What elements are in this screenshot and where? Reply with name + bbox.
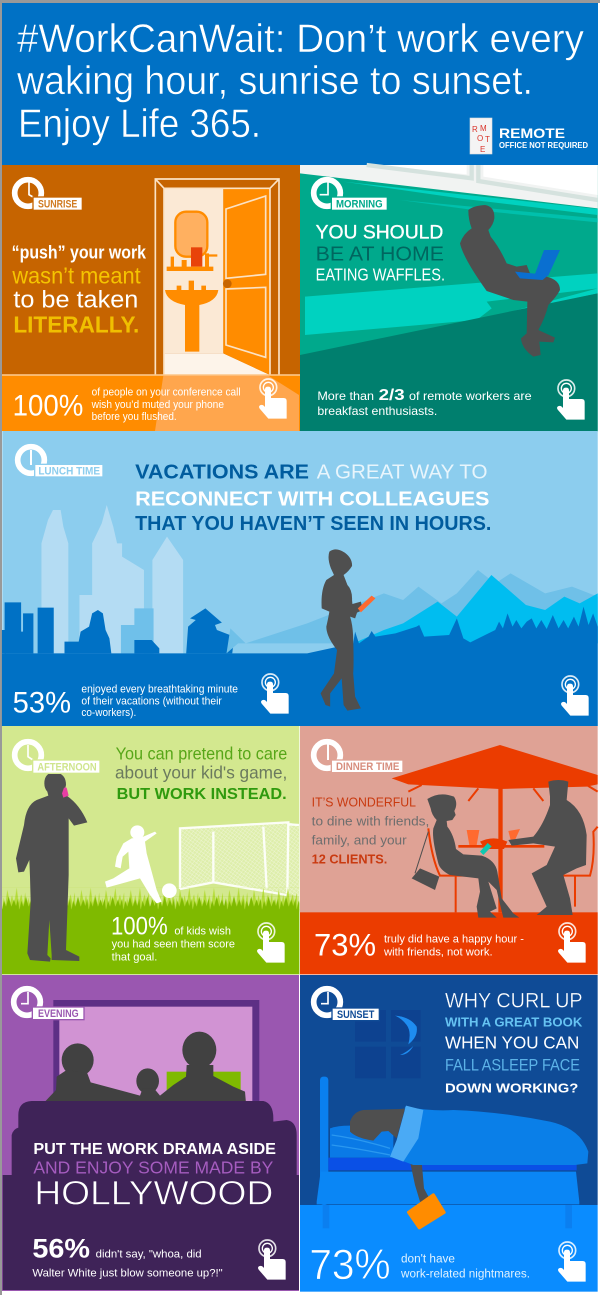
- headline: LITERALLY.: [13, 312, 139, 338]
- headline: [316, 222, 445, 285]
- headline: You can pretend to care: [116, 743, 287, 763]
- stat text: of kids wish: [174, 925, 231, 937]
- page border: [0, 0, 2, 1295]
- logo text: Remote: REMOTE: [499, 125, 565, 141]
- stat text: of their vacations (without their: [81, 694, 222, 707]
- stat text: [13, 682, 238, 719]
- title: [16, 17, 584, 146]
- stat text: enjoyed every breathtaking minute: [81, 682, 238, 695]
- icon: sunrise clock: [15, 178, 82, 210]
- stat text: breakfast enthusiasts.: [317, 405, 437, 418]
- headline: BUT WORK INSTEAD.: [117, 786, 287, 803]
- stat bar: of people on your conference call: [92, 387, 241, 399]
- stat text: Walter White just blow someone up?!": [32, 1268, 223, 1280]
- icon: tap hand, sunrise: [259, 379, 287, 419]
- headline: family, and your: [312, 832, 407, 847]
- headline: AND ENJOY SOME MADE BY: [33, 1157, 274, 1177]
- panel: header: [2, 3, 598, 165]
- ground and trees: [2, 607, 598, 726]
- headline: BE AT HOME: [316, 244, 444, 266]
- icon: tap hand, dinner: [558, 923, 586, 963]
- logo text: Remote: [499, 125, 588, 150]
- logo text: Remote: OFFICE NOT REQUIRED: [499, 141, 588, 150]
- stat bar: [2, 374, 300, 431]
- icon: tap hand, sunset: [558, 1242, 586, 1282]
- headline: about your kid's game,: [115, 762, 287, 782]
- headline: wasn’t meant: [11, 262, 141, 288]
- icon: afternoon clock: [15, 740, 100, 773]
- headline: A GREAT WAY TO: [317, 460, 488, 483]
- stat text: 53%: [13, 686, 71, 719]
- icon: tap hand, afternoon: [257, 923, 285, 963]
- stat text: with friends, not work.: [383, 947, 493, 959]
- stat text: didn't say, "whoa, did: [96, 1249, 202, 1261]
- panel: afternoon: [2, 726, 299, 974]
- illustration: soccer goal: [180, 822, 299, 897]
- headline: to dine with friends,: [312, 814, 429, 829]
- icon: sunrise clock: SUNRISE: [38, 198, 77, 210]
- stat text: [111, 912, 235, 964]
- headline: IT’S WONDERFUL: [312, 795, 416, 810]
- icon: lunch clock: [18, 445, 103, 477]
- icon: sunset clock: [314, 987, 379, 1021]
- icon: afternoon clock: AFTERNOON: [37, 761, 97, 773]
- stat text: 73%: [309, 1241, 391, 1289]
- stat text: 73%: [314, 928, 376, 963]
- illustration: mountains: [227, 570, 598, 653]
- illustration: man at table: [508, 780, 587, 915]
- stat text: 2/3: [379, 387, 405, 404]
- stat text: [314, 928, 524, 963]
- title: Enjoy Life 365.: [18, 102, 261, 146]
- headline: PUT THE WORK DRAMA ASIDE: [33, 1141, 276, 1158]
- headline: [312, 795, 429, 866]
- panel: dinner time: [300, 726, 598, 974]
- headline: HOLLYWOOD: [34, 1174, 273, 1212]
- icon: morning clock: [314, 178, 387, 210]
- illustration: family silhouettes: [45, 1032, 246, 1103]
- stat text: of remote workers are: [409, 390, 532, 403]
- icon: tap hand, evening: [258, 1240, 286, 1280]
- illustration: bed with sleeping person: [317, 1077, 588, 1228]
- illustration: window and moon: [355, 1010, 421, 1078]
- icon: sunset clock: SUNSET: [337, 1009, 375, 1021]
- panel: sunset: [300, 975, 598, 1292]
- grass: [2, 888, 299, 974]
- stat text: work-related nightmares.: [400, 1267, 530, 1281]
- illustration: city skyline: [2, 505, 234, 653]
- icon: book cover: T: [485, 135, 490, 144]
- icon: tap hand, lunch left: [261, 674, 289, 714]
- headline: [11, 241, 147, 338]
- icon: lunch clock: LUNCH TIME: [38, 465, 100, 477]
- panel: lunch time: [2, 431, 598, 726]
- panel: sunrise: [2, 165, 300, 431]
- headline: RECONNECT WITH COLLEAGUES: [135, 487, 489, 510]
- title: #WorkCanWait: Don’t work every: [17, 17, 584, 61]
- icon: book cover: E: [480, 145, 485, 154]
- illustration: child kicking ball: [105, 825, 177, 903]
- headline: THAT YOU HAVEN’T SEEN IN HOURS.: [135, 511, 491, 535]
- headline: YOU SHOULD: [316, 222, 443, 243]
- illustration: man with laptop: [460, 205, 560, 357]
- headline: DOWN WORKING?: [445, 1080, 578, 1095]
- stat text: More than: [317, 390, 374, 403]
- icon: evening clock: EVENING: [38, 1008, 79, 1020]
- headline: WITH A GREAT BOOK: [445, 1015, 583, 1030]
- stat text: don't have: [401, 1251, 455, 1265]
- icon: book cover: R: [472, 125, 478, 134]
- illustration: man on phone: [16, 772, 87, 962]
- icon: book cover: M: [480, 124, 487, 133]
- stat bar: wish you’d muted your phone: [91, 399, 224, 411]
- panel: evening: [2, 975, 299, 1291]
- stat text: 56%: [32, 1234, 90, 1264]
- headline: WHEN YOU CAN: [445, 1032, 579, 1052]
- icon: book cover: [470, 118, 492, 154]
- headline: “push” your work: [12, 241, 147, 262]
- headline: EATING WAFFLES.: [316, 265, 445, 285]
- stat text: 100%: [111, 912, 168, 940]
- illustration: television: [53, 1000, 259, 1103]
- illustration: umbrella table and chairs: [392, 745, 598, 912]
- stat text: truly did have a happy hour -: [384, 933, 524, 945]
- icon: dinner clock: DINNER TIME: [336, 761, 399, 773]
- icon: tap hand, morning: [557, 380, 585, 420]
- icon: book cover: O: [477, 134, 483, 143]
- headline: [135, 460, 491, 535]
- headline: [115, 743, 287, 803]
- headline: [445, 988, 583, 1095]
- icon: dinner clock: [314, 740, 403, 773]
- headline: [33, 1141, 276, 1212]
- headline: VACATIONS ARE: [135, 460, 309, 483]
- window: [300, 165, 598, 208]
- headline: WHY CURL UP: [445, 988, 583, 1012]
- illustration: bathroom door: [155, 179, 279, 375]
- stat bar: before you flushed.: [92, 411, 177, 423]
- title: waking hour, sunrise to sunset.: [16, 59, 533, 103]
- icon: tap hand, lunch right: [561, 676, 589, 716]
- panel: morning: [300, 165, 598, 432]
- icon: morning clock: MORNING: [336, 198, 383, 210]
- illustration: woman with tablet: [321, 549, 375, 711]
- headline: FALL ASLEEP FACE: [445, 1056, 580, 1075]
- illustration: woman with phone and bag: [412, 794, 519, 918]
- sofa: [3, 1101, 299, 1290]
- stat text: [317, 387, 532, 418]
- stat bar: 100%: [13, 390, 83, 423]
- icon: evening clock: [14, 987, 84, 1020]
- stat text: [32, 1234, 223, 1280]
- stat text: co-workers).: [81, 706, 136, 719]
- stat text: [309, 1241, 530, 1289]
- headline: 12 CLIENTS.: [312, 852, 387, 866]
- headline: to be taken: [13, 287, 138, 314]
- stat text: that goal.: [112, 952, 157, 964]
- stat text: you had seen them score: [112, 939, 235, 951]
